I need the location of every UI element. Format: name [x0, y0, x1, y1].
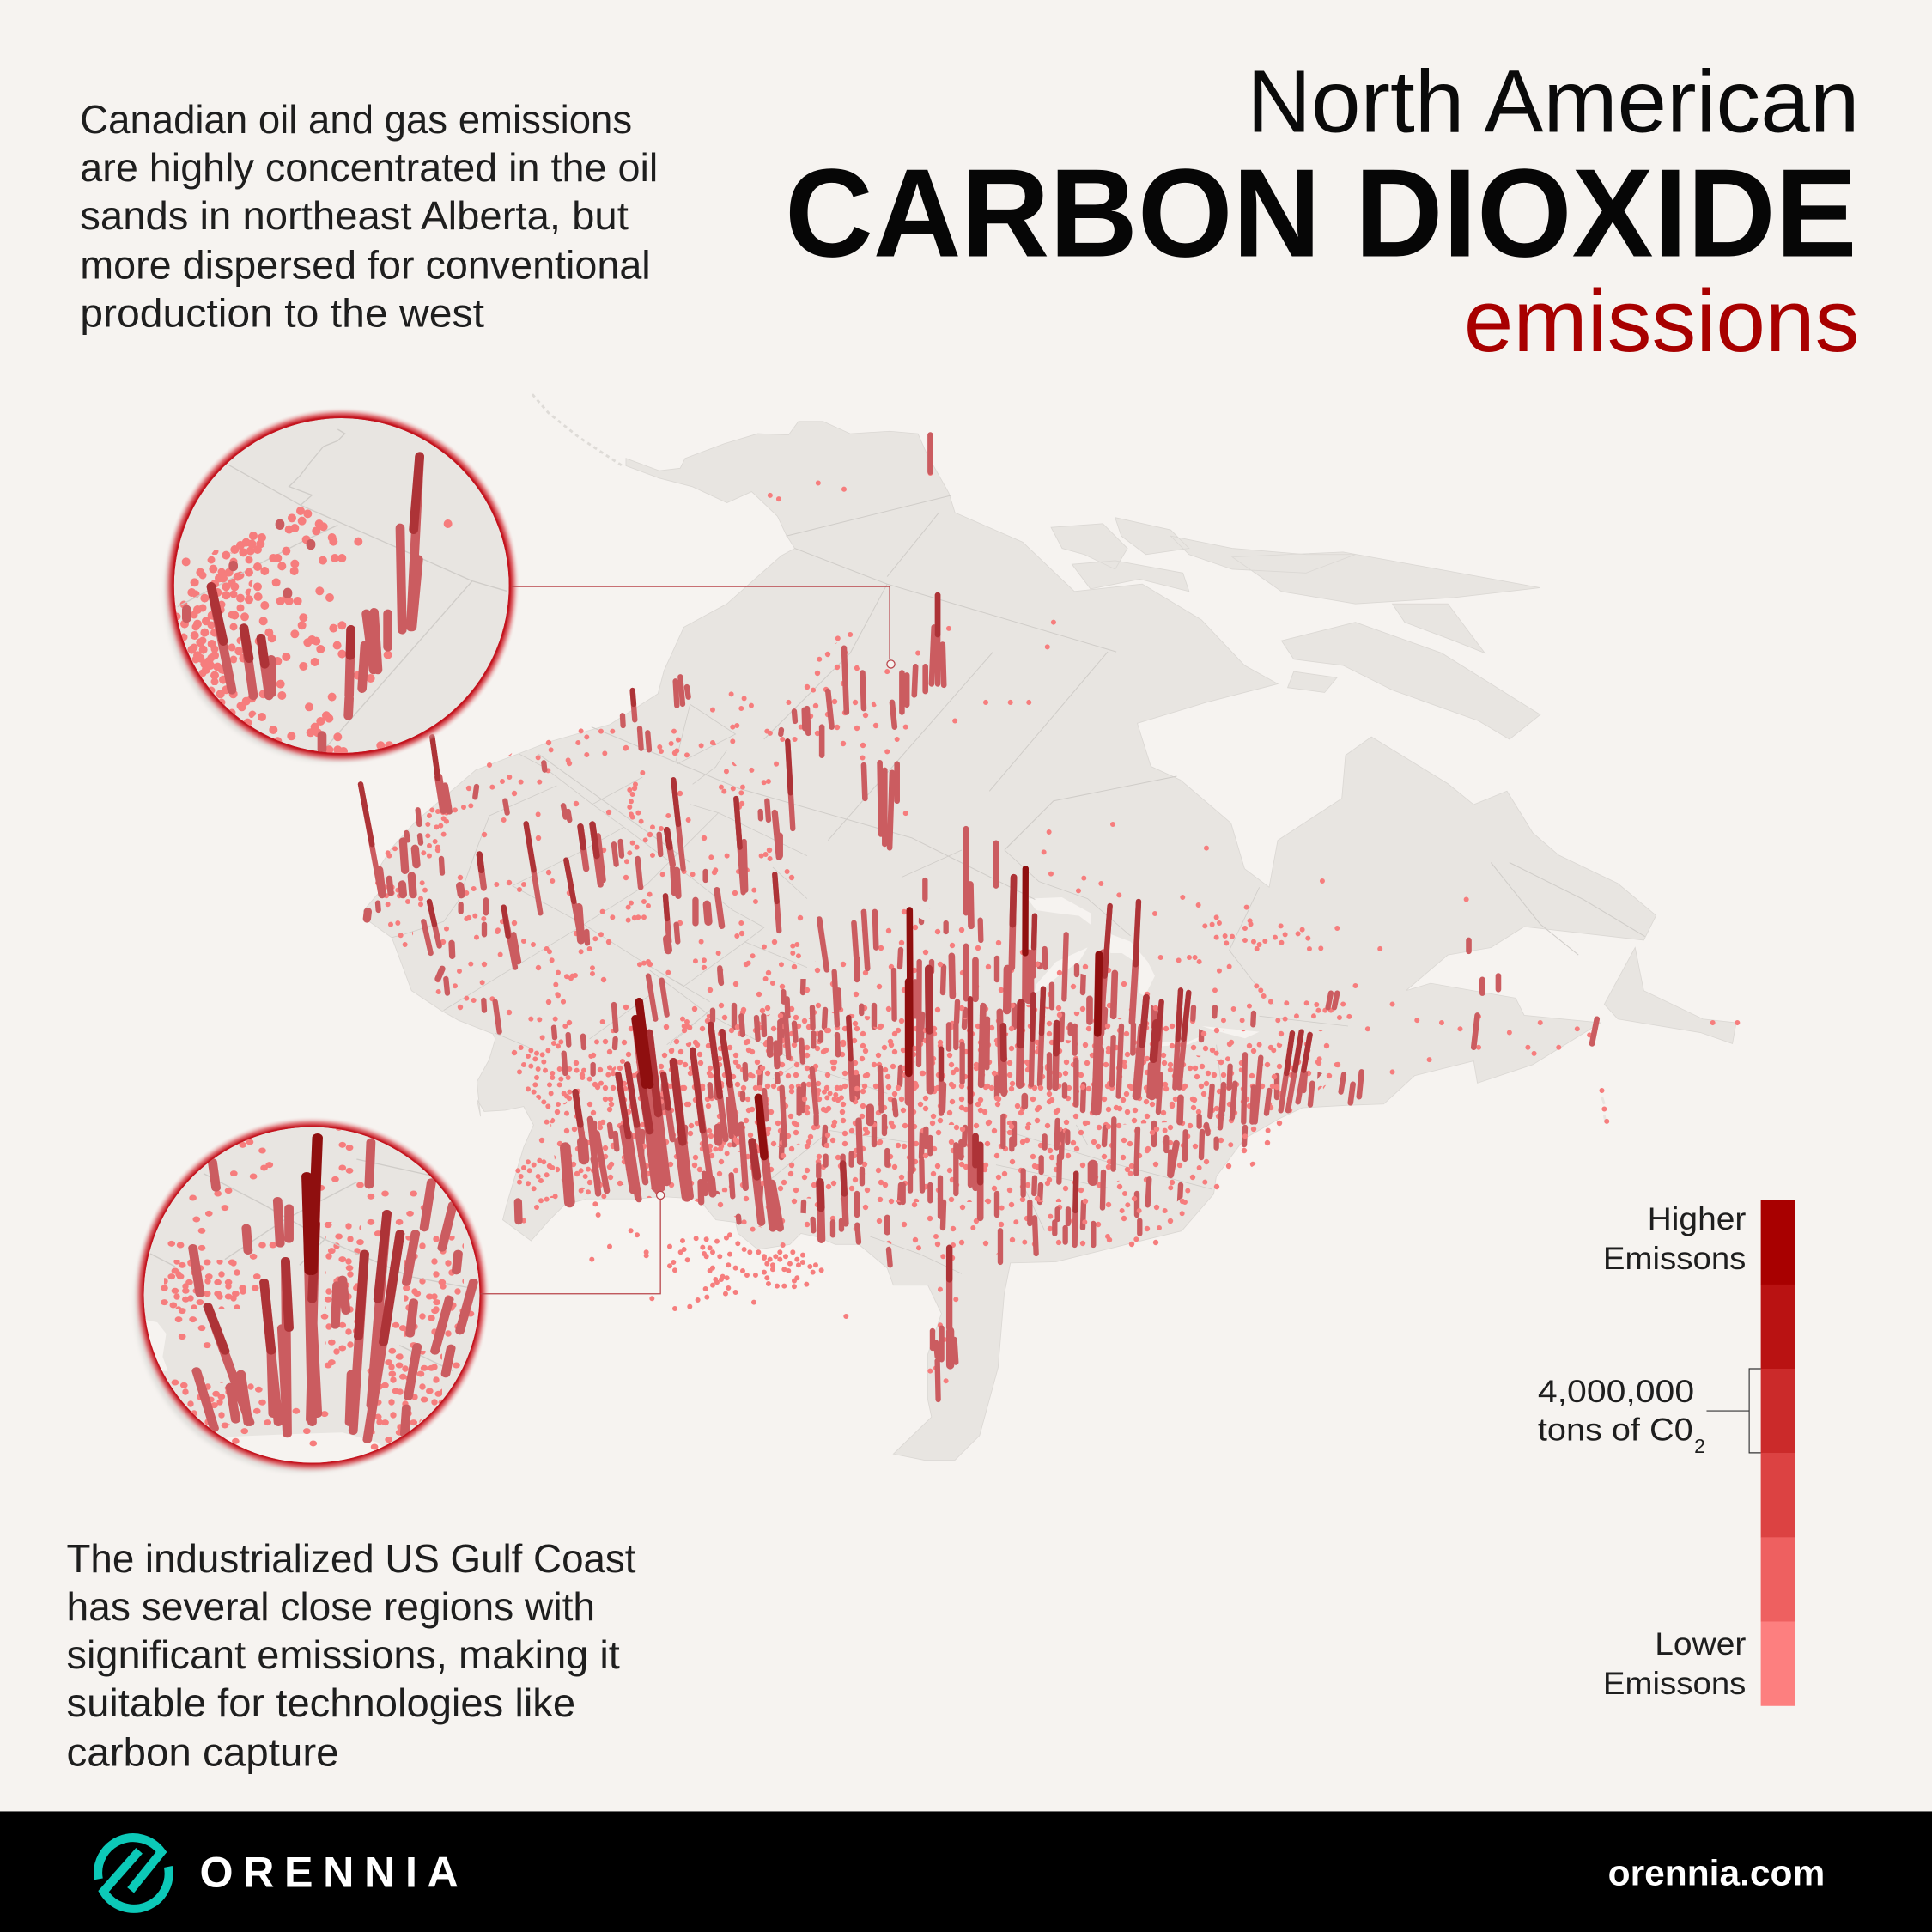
second dense dot field: Louisiana and Ohio valley	[550, 1005, 1288, 1202]
text block: Canadian emissions: Canadian oil and gas emissions	[80, 97, 632, 142]
land masses	[363, 394, 1736, 1460]
great lakes	[1028, 897, 1260, 1046]
legend labels: 2	[1694, 1435, 1705, 1457]
legend labels: Lower	[1655, 1625, 1746, 1662]
connector: Gulf Coast inset to map	[481, 1191, 665, 1294]
inset: Alberta oil sands	[163, 407, 520, 764]
inset map	[174, 418, 509, 753]
dense dot cluster, lower left	[176, 550, 258, 738]
map of North America with emission bars	[361, 394, 1737, 1460]
website: orennia.com	[1608, 1853, 1825, 1893]
text block: Gulf Coast: suitable for technologies like	[66, 1680, 575, 1725]
sparse dot field: west	[412, 713, 824, 1108]
title: North American	[1247, 52, 1859, 151]
title	[785, 52, 1859, 370]
Gulf Coast and southern bars	[518, 970, 956, 1400]
inset red glow ring	[163, 407, 520, 764]
footer band	[0, 1811, 1932, 1932]
legend bracket	[1706, 1369, 1761, 1453]
Permian, Texas and Gulf dots	[518, 976, 956, 1381]
inset shadow	[165, 423, 503, 762]
text block: Canadian emissions: more dispersed for conventional	[80, 242, 651, 287]
western bars	[361, 677, 805, 1032]
Orennia wordmark: ORENNIA	[199, 1849, 459, 1897]
footer	[0, 1811, 1932, 1932]
Quebec and Ontario dots	[919, 824, 1340, 1248]
legend colour scale	[1761, 1200, 1795, 1706]
connector: Alberta inset to map	[512, 586, 895, 668]
short bar field: eastern US	[584, 910, 1322, 1236]
text block: Gulf Coast	[66, 1536, 636, 1774]
title: emissions	[1464, 270, 1859, 370]
emission bars	[361, 435, 1597, 1400]
western dots	[378, 694, 799, 1002]
northern and eastern bars	[807, 435, 1597, 1103]
legend labels: Higher	[1648, 1200, 1746, 1236]
province and state borders	[392, 495, 1645, 1273]
text block: Gulf Coast: significant emissions, making it	[66, 1632, 620, 1677]
Alberta, Atlantic and Alaska dots	[733, 473, 1737, 1121]
Alberta dot cluster	[803, 635, 893, 756]
legend	[1538, 1200, 1795, 1706]
text block: Gulf Coast: carbon capture	[66, 1729, 339, 1774]
legend labels	[1538, 1200, 1746, 1701]
inset red glow ring	[133, 1116, 490, 1473]
medium dot field: eastern US	[532, 893, 1340, 1262]
logo mark	[98, 1838, 169, 1909]
inset: US Gulf Coast	[133, 1116, 490, 1477]
text block: Canadian emissions: are highly concentrated in the oil	[80, 145, 658, 190]
inset dot fields	[164, 1222, 464, 1434]
text block: Canadian emissions	[80, 97, 658, 335]
emission dots	[378, 473, 1737, 1381]
legend labels: Emissons	[1603, 1240, 1746, 1276]
inset map	[136, 1127, 480, 1477]
inset shadow	[135, 1133, 473, 1472]
dense dot field: midwest and northeast	[601, 1005, 1348, 1168]
legend labels: Emissons	[1603, 1665, 1746, 1701]
title: CARBON DIOXIDE	[785, 143, 1857, 283]
text block: Gulf Coast: has several close regions with	[66, 1584, 595, 1629]
text block: Canadian emissions: sands in northeast Alberta, but	[80, 193, 629, 238]
text block: Gulf Coast: The industrialized US Gulf Coast	[66, 1536, 636, 1581]
midwest and northeast bars	[903, 829, 1344, 1262]
legend labels: 4,000,000	[1538, 1373, 1694, 1409]
legend labels: tons of C0	[1538, 1412, 1693, 1448]
text block: Canadian emissions: production to the west	[80, 290, 484, 335]
